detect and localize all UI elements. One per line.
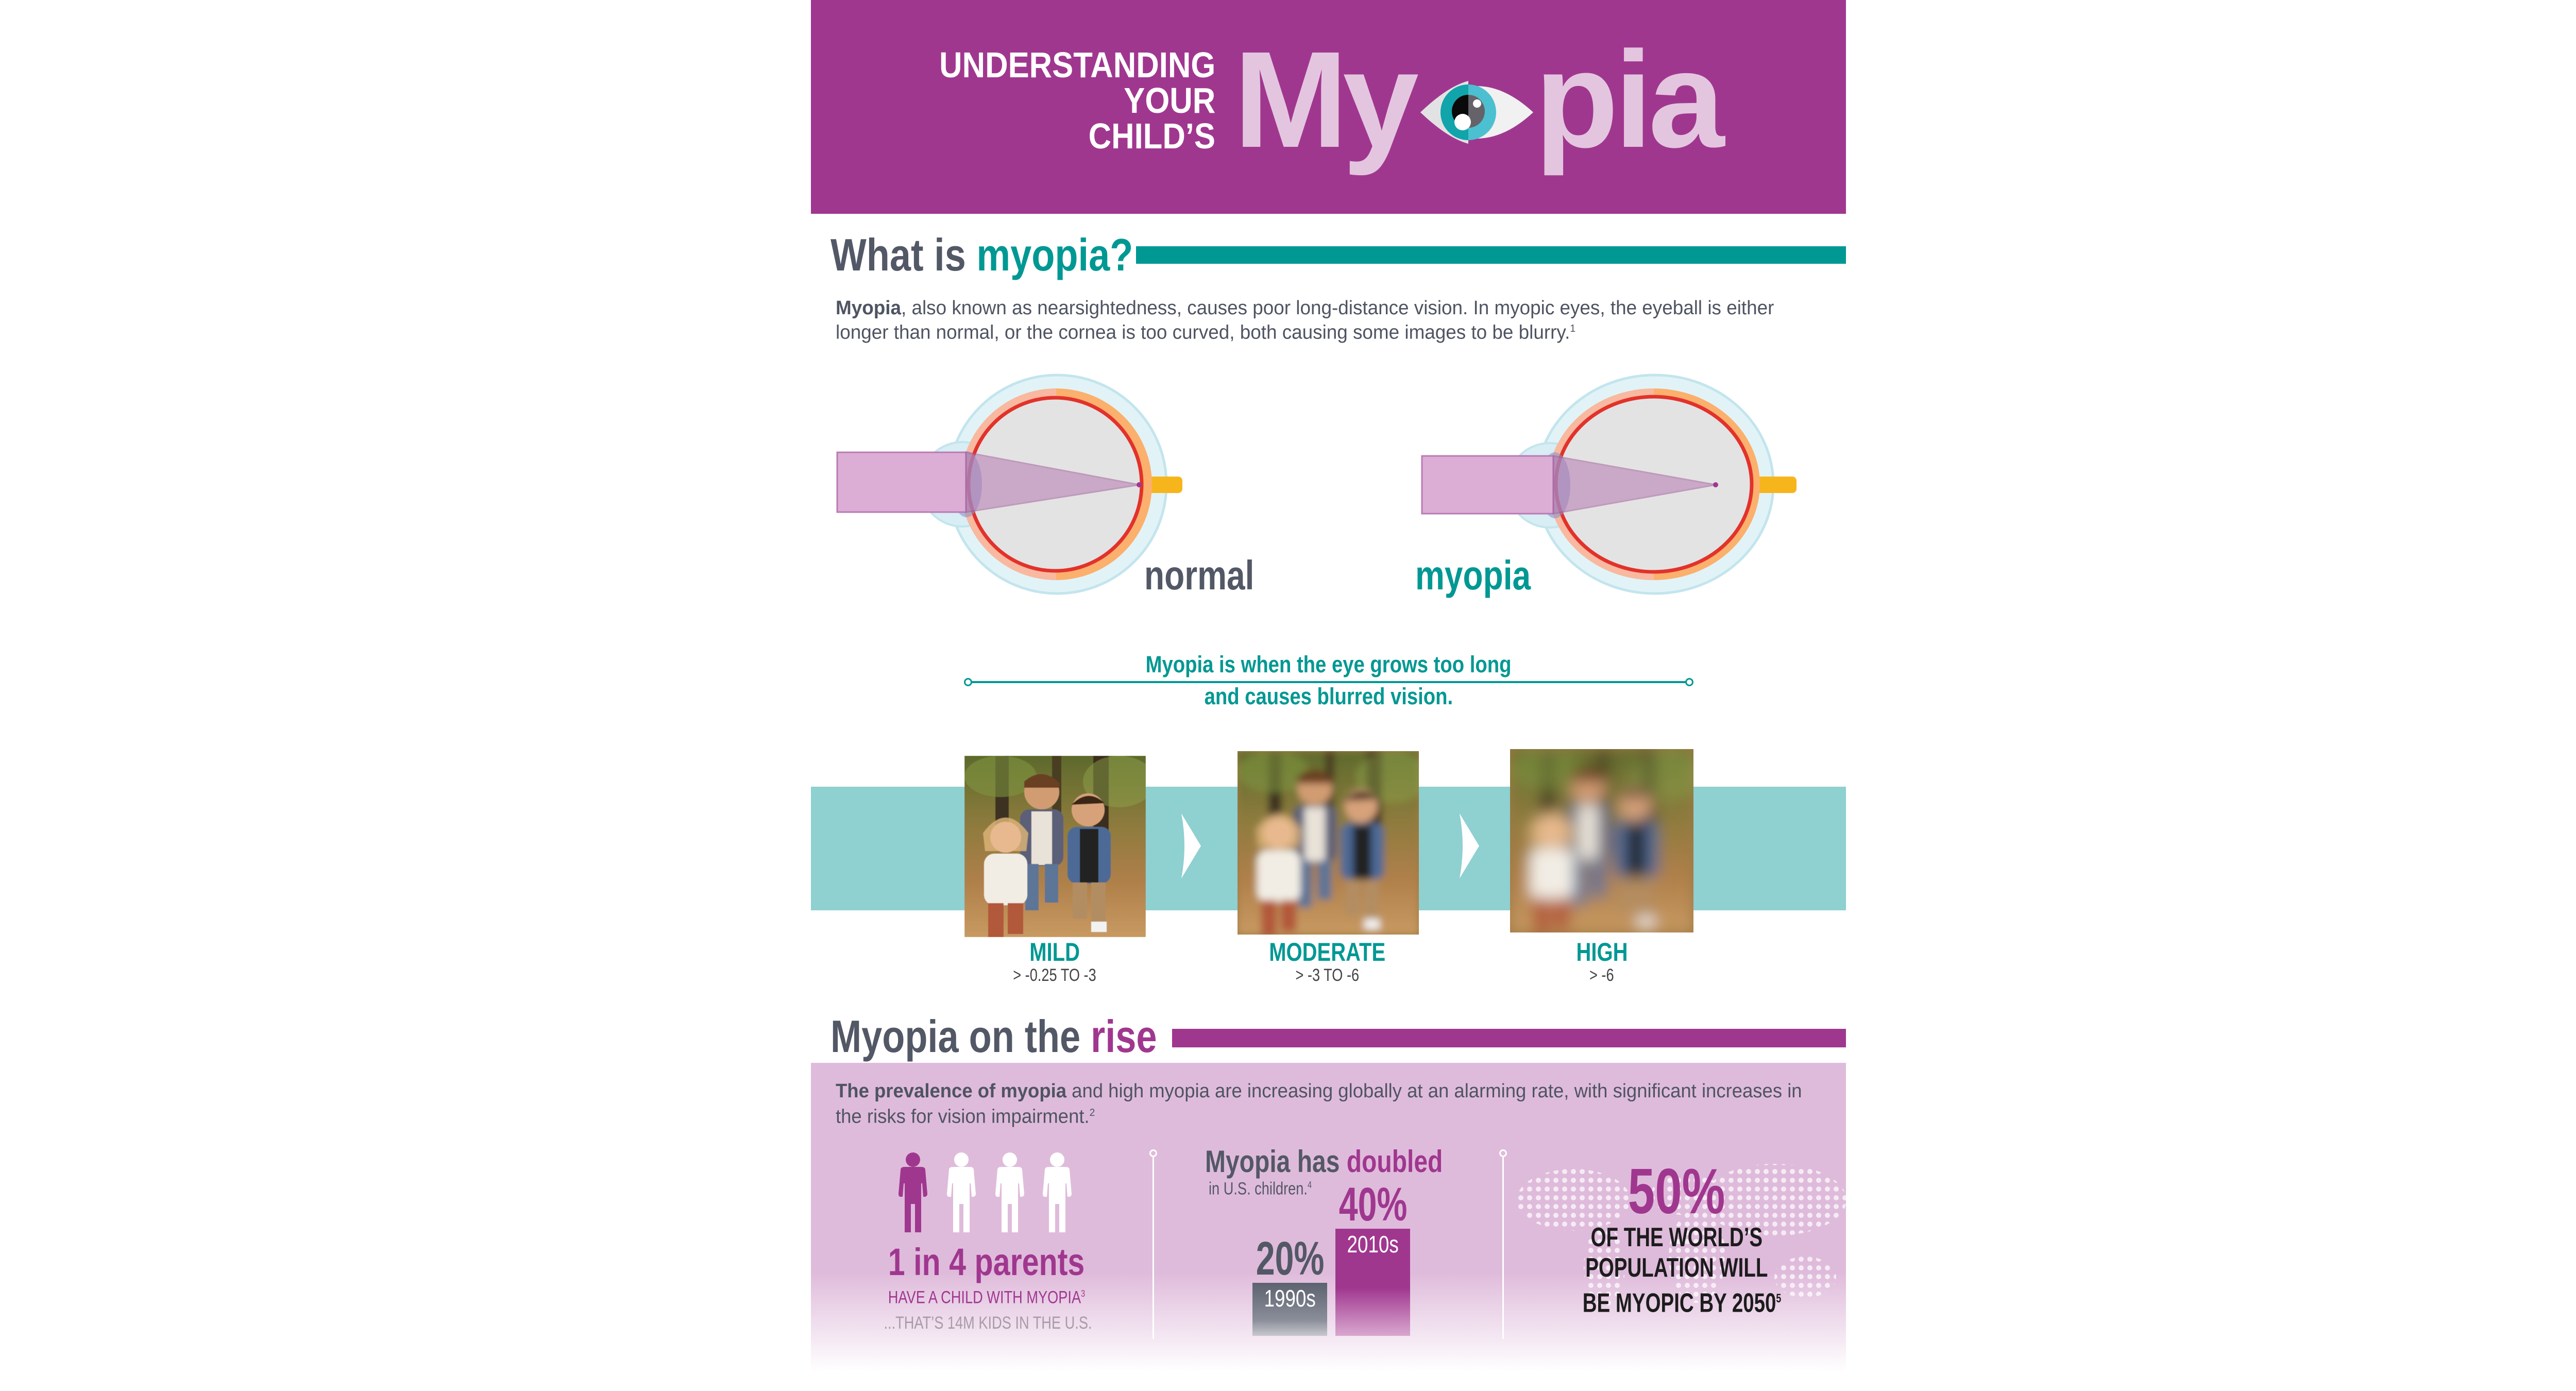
- label: high: HIGH: [1576, 938, 1628, 966]
- stat: 50% of world: 50%: [1628, 1156, 1725, 1227]
- bar 1990s: 1990s: [1264, 1285, 1316, 1312]
- rise paragraph: The prevalence of myopia and high myopia are increasing globally at an alarming rate, with significant increases in: [836, 1080, 1802, 1102]
- heading: Myopia on the rise: Myopia on the rise: [831, 1011, 1157, 1062]
- subtitle: understanding your child's: YOUR: [1124, 80, 1215, 121]
- subtitle: understanding your child's: CHILD’S: [1089, 116, 1215, 156]
- bar 2010s: 2010s: [1347, 1231, 1399, 1258]
- label: mild: MILD: [1029, 938, 1080, 966]
- label: moderate: > -3 TO -6: [1295, 965, 1359, 985]
- label: high: > -6: [1589, 965, 1614, 985]
- stat: 1 in 4 parents: [884, 1241, 1092, 1333]
- bar 2010s: [1335, 1229, 1410, 1336]
- panel: rise stats: [811, 1063, 1846, 1391]
- label: mild: [1013, 938, 1096, 985]
- chart: myopia doubled: [1202, 1145, 1450, 1341]
- photo: moderate: [1238, 751, 1419, 935]
- intro paragraph: longer than normal, or the cornea is too curved, both causing some images to be blurry.1: [836, 322, 1575, 344]
- divider 2: [1499, 1149, 1507, 1340]
- icon: four people: [899, 1152, 1072, 1232]
- caption: myopia definition: Myopia is when the eye grows too long: [1146, 651, 1512, 677]
- heading bar purple: [1172, 1029, 1846, 1047]
- divider 1: [1149, 1149, 1158, 1340]
- stat: 50% of world: POPULATION WILL: [1585, 1253, 1768, 1283]
- arrow 1: [1181, 813, 1201, 878]
- label: high: [1576, 938, 1628, 985]
- label: normal: normal: [1144, 552, 1254, 598]
- intro paragraph: [836, 297, 1774, 344]
- chart title: Myopia has doubled: [1205, 1144, 1443, 1179]
- stat: 1 in 4 parents: ...THAT’S 14M KIDS IN THE U.S.: [884, 1313, 1092, 1333]
- heading: What is myopia?: What is myopia?: [831, 229, 1133, 280]
- stat: 50% of world: [1548, 1161, 1805, 1318]
- label: moderate: MODERATE: [1269, 938, 1385, 966]
- label: moderate: [1269, 938, 1385, 985]
- photo: mild: [964, 756, 1146, 937]
- stat: 1 in 4 parents: HAVE A CHILD WITH MYOPIA3: [888, 1287, 1085, 1307]
- bar 1990s: [1252, 1283, 1327, 1336]
- stat: 1 in 4 parents: 1 in 4 parents: [888, 1241, 1085, 1283]
- stat: 50% of world: OF THE WORLD’S: [1590, 1223, 1762, 1252]
- label: mild: > -0.25 TO -3: [1013, 965, 1096, 985]
- caption: myopia definition: [964, 651, 1693, 709]
- title word: pia: pia: [1535, 23, 1720, 176]
- photo: high: [1510, 749, 1693, 932]
- value 40%: 40%: [1339, 1178, 1407, 1231]
- label: myopia: myopia: [1415, 552, 1531, 598]
- header banner: [811, 0, 1846, 214]
- subtitle: understanding your child's: [939, 45, 1215, 156]
- chart: myopia doubled: in U.S. children.4: [1209, 1179, 1312, 1198]
- world map dots: [1518, 1164, 1846, 1305]
- myopia eye: [1422, 375, 1797, 593]
- normal eye: [837, 375, 1182, 593]
- heading bar teal: [1136, 246, 1846, 264]
- value 20%: 20%: [1256, 1232, 1324, 1285]
- diagram: eye comparison: [837, 374, 1797, 595]
- intro paragraph: Myopia, also known as nearsightedness, causes poor long-distance vision. In myopic eyes, the eyeball is either: [836, 297, 1774, 319]
- rise paragraph: [836, 1080, 1802, 1128]
- rise paragraph: the risks for vision impairment.2: [836, 1106, 1095, 1128]
- arrow 2: [1460, 813, 1479, 878]
- subtitle: understanding your child's: UNDERSTANDING: [939, 45, 1215, 85]
- icon: eye logo: [1420, 81, 1533, 144]
- teal band: [811, 787, 1846, 910]
- stat: 50% of world: BE MYOPIC BY 20505: [1583, 1288, 1781, 1318]
- caption: myopia definition: and causes blurred vision.: [1205, 683, 1453, 709]
- title word: My: My: [1233, 23, 1414, 176]
